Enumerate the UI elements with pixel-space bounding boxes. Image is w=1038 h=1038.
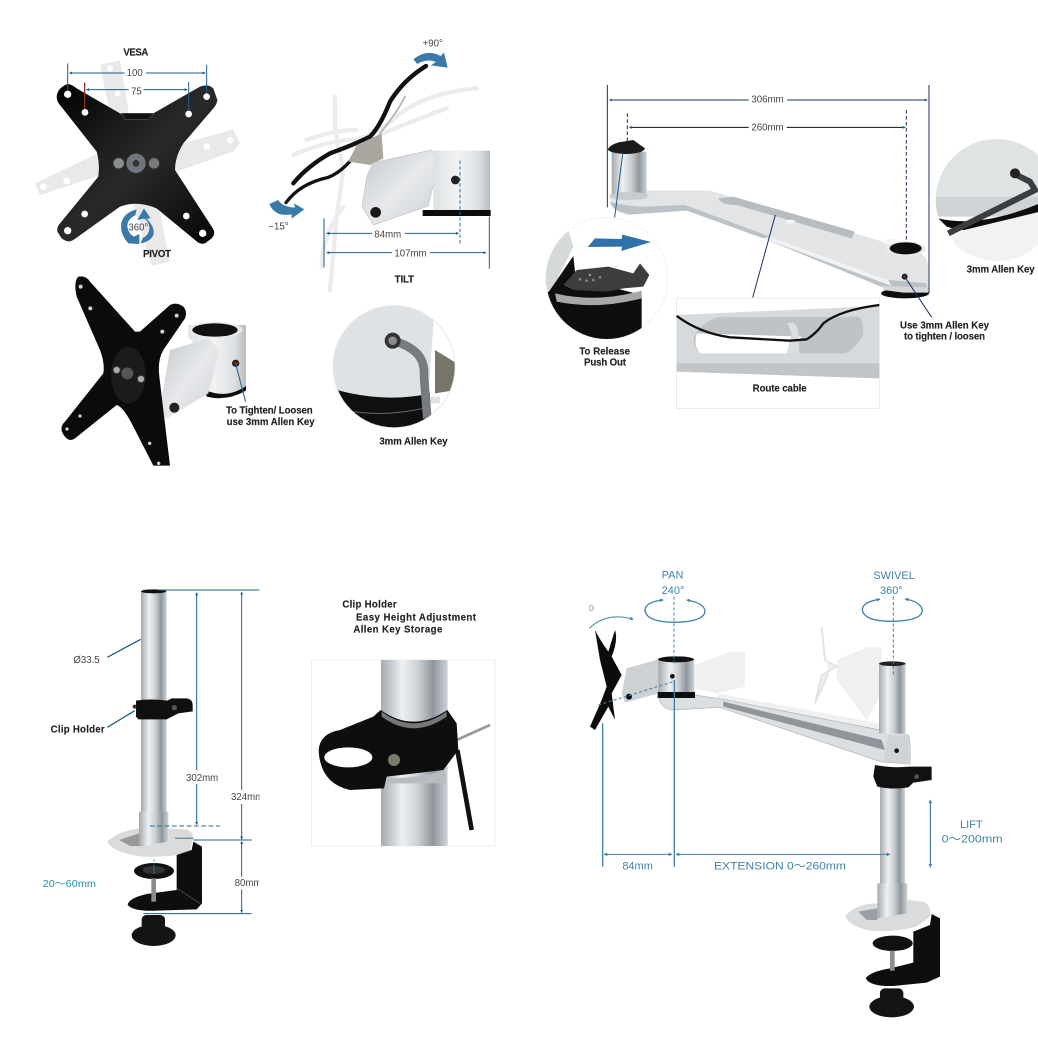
icon: push-out arrow xyxy=(588,235,651,251)
VESA plate xyxy=(57,84,217,244)
icon: 360 degree pivot arrows: 360° xyxy=(128,222,148,233)
ghost plate rotated behind VESA plate xyxy=(35,60,240,266)
panel: VESA, tilt and Allen key details xyxy=(35,39,491,466)
height dimension 324mm and 80mm: 324mm xyxy=(231,792,263,803)
Allen key caption: 3mm Allen Key xyxy=(967,264,1035,275)
silver head xyxy=(188,325,246,394)
tilt head body xyxy=(362,150,438,225)
VESA heading: VESA xyxy=(123,48,148,59)
lift arrow xyxy=(929,800,932,867)
SWIVEL label: 360° xyxy=(880,585,903,597)
inset: route cable xyxy=(677,298,879,408)
centre dimension 260mm: 260mm xyxy=(751,123,784,134)
clip holder on pole xyxy=(133,698,193,719)
arm illustration xyxy=(608,140,929,298)
VESA 100 dimension: 100 xyxy=(127,68,143,79)
clip holder heading: Allen Key Storage xyxy=(353,624,443,635)
height dimension 324mm and 80mm: 80mm xyxy=(235,878,262,889)
side-on monitor plate xyxy=(590,630,622,730)
clip holder heading xyxy=(342,599,477,635)
tilt dimension 84mm: 84mm xyxy=(374,229,401,240)
tilt joint xyxy=(348,133,383,165)
PAN label: 240° xyxy=(662,585,684,597)
release caption: To Release xyxy=(579,346,631,357)
clip holder callout xyxy=(51,711,135,736)
icon: tilt +90 arrow xyxy=(413,53,448,68)
pole upper xyxy=(879,661,906,733)
extension label: EXTENSION 0～260mm xyxy=(714,860,846,872)
SWIVEL label xyxy=(873,570,915,597)
tilt dimension 107mm: 107mm xyxy=(394,249,427,260)
leader line to cable xyxy=(753,215,775,298)
tilted black plate xyxy=(286,66,426,203)
panel: full assembly with range of motion xyxy=(589,570,1003,1017)
height dimension 302mm: 302mm xyxy=(186,773,218,784)
tilt diagram xyxy=(286,66,491,290)
lift label: LIFT xyxy=(960,819,983,831)
clip holder heading: Easy Height Adjustment xyxy=(356,613,477,624)
overall dimension 306mm xyxy=(607,85,929,293)
tighten caption: use 3mm Allen Key xyxy=(227,417,315,428)
VESA 75 dimension: 75 xyxy=(131,86,142,97)
TILT label: TILT xyxy=(395,275,414,286)
lift label: 0～200mm xyxy=(942,834,1003,846)
clip holder heading: Clip Holder xyxy=(342,599,397,610)
icon: tilt arc fragment xyxy=(589,604,633,628)
route cable caption: Route cable xyxy=(753,383,807,394)
height dimension 324mm and 80mm xyxy=(143,590,263,914)
diameter callout: Ø33.5 xyxy=(73,655,100,666)
VESA 100 dimension xyxy=(68,63,207,93)
lift label xyxy=(942,819,1003,846)
pan head xyxy=(622,656,695,703)
icon: tilt -15 arrow xyxy=(269,200,304,219)
release caption xyxy=(579,346,631,368)
leader line to Allen key xyxy=(905,277,932,317)
icon: swivel rotation arrow xyxy=(862,599,922,621)
main arm xyxy=(658,695,910,764)
inset: Allen key on arm xyxy=(935,138,1038,263)
centre dimension 260mm xyxy=(627,110,906,250)
+90 label: +90° xyxy=(423,39,443,50)
C-clamp xyxy=(128,842,202,946)
icon: 360 degree pivot arrows xyxy=(121,208,154,244)
arm Allen key caption: to tighten / loosen xyxy=(904,331,985,342)
black plate xyxy=(61,276,186,466)
ghost tilt positions xyxy=(293,88,477,290)
84mm label: 84mm xyxy=(622,860,653,872)
clip holder xyxy=(873,765,932,789)
leader line xyxy=(236,365,246,402)
dashed axis lines xyxy=(598,597,893,705)
panel: extension arm xyxy=(543,85,1038,408)
leader line to release xyxy=(615,154,623,217)
tighten caption xyxy=(226,405,315,428)
icon: pan rotation arrow xyxy=(645,600,705,622)
PAN label xyxy=(662,570,684,597)
pan dimension lines xyxy=(603,680,890,867)
-15 label: −15° xyxy=(268,221,289,232)
tighten caption: To Tighten/ Loosen xyxy=(226,405,313,416)
ghost retracted head xyxy=(695,627,882,730)
pole lower with clamp xyxy=(845,787,940,1017)
SWIVEL label: SWIVEL xyxy=(873,570,915,582)
inset caption: 3mm Allen Key xyxy=(379,436,448,447)
desk thickness label: 20～60mm xyxy=(43,879,96,890)
tilt dimension 84mm xyxy=(324,217,489,269)
desk base xyxy=(107,828,193,857)
icon: tilt arc fragment: D xyxy=(589,604,594,613)
VESA 75 dimension xyxy=(85,82,189,110)
panel: pole and clamp xyxy=(43,589,495,946)
overall dimension 306mm: 306mm xyxy=(751,95,784,106)
PAN label: PAN xyxy=(662,570,684,582)
diameter callout xyxy=(73,639,141,666)
inset: 3mm Allen key at head xyxy=(332,306,456,428)
PIVOT label: PIVOT xyxy=(143,249,171,260)
arm Allen key caption xyxy=(900,320,990,342)
release caption: Push Out xyxy=(584,357,627,368)
inset: clip holder close-up xyxy=(312,660,495,846)
arm Allen key caption: Use 3mm Allen Key xyxy=(900,320,990,331)
plate and head assembly xyxy=(61,276,246,466)
inset: release latch xyxy=(543,217,668,343)
clip holder callout: Clip Holder xyxy=(51,725,105,736)
pole xyxy=(139,589,168,847)
desk thickness dimension xyxy=(152,859,155,873)
